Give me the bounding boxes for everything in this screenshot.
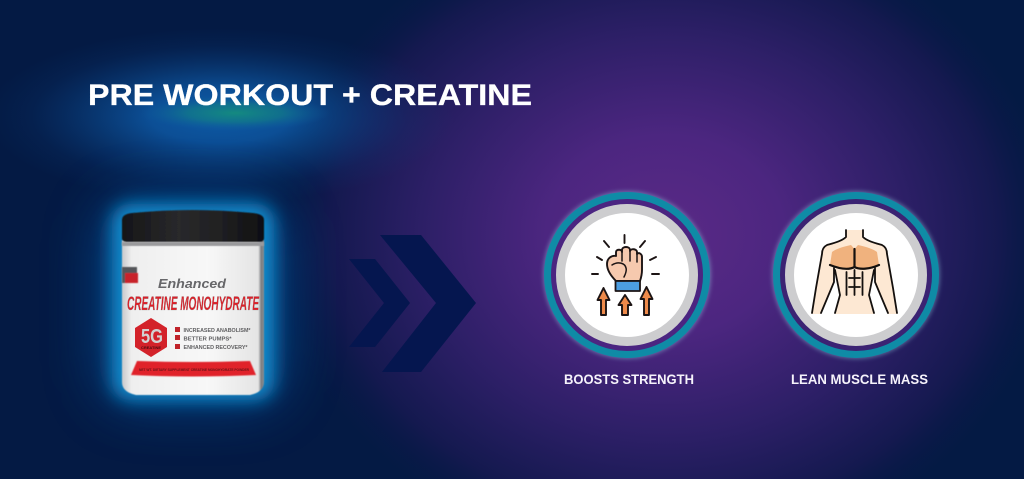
double chevron arrow (349, 235, 476, 372)
title: PRE WORKOUT + CREATINE (88, 79, 532, 112)
brand: Enhanced (158, 276, 227, 291)
label: LEAN MUSCLE MASS (791, 372, 928, 387)
benefit list: INCREASED ANABOLISM* (184, 328, 251, 334)
outer jar glow (100, 200, 285, 405)
red band (131, 361, 256, 376)
lid shadow (122, 242, 264, 246)
ring glow (548, 196, 706, 354)
red hexagon badge: 5G (141, 326, 163, 348)
teal ring (548, 196, 706, 354)
label: BOOSTS STRENGTH (564, 372, 694, 387)
benefit: lean muscle mass (776, 196, 936, 387)
inner jar glow (112, 204, 274, 400)
ring glow (776, 196, 936, 354)
jar lid (122, 210, 264, 242)
benefit list: ENHANCED RECOVERY* (184, 345, 248, 351)
red hexagon badge (135, 318, 167, 357)
benefit list: BETTER PUMPS* (184, 336, 232, 342)
benefit list (175, 327, 251, 351)
product jar with blue glow (100, 200, 285, 405)
icon: fist with arrows (592, 235, 659, 315)
benefit: boosts strength (548, 196, 706, 387)
teal ring (776, 196, 936, 354)
product name: CREATINE MONOHYDRATE (127, 294, 260, 315)
red band: NET WT. DIETARY SUPPLEMENT CREATINE MONOHYDRATE POWDER (139, 368, 249, 372)
icon: torso (812, 230, 897, 314)
gray ring and white disc (790, 208, 922, 342)
jar body (122, 240, 264, 395)
gray ring and white disc (560, 208, 694, 342)
red hexagon badge: CREATINE (141, 345, 161, 350)
side label (122, 267, 138, 283)
